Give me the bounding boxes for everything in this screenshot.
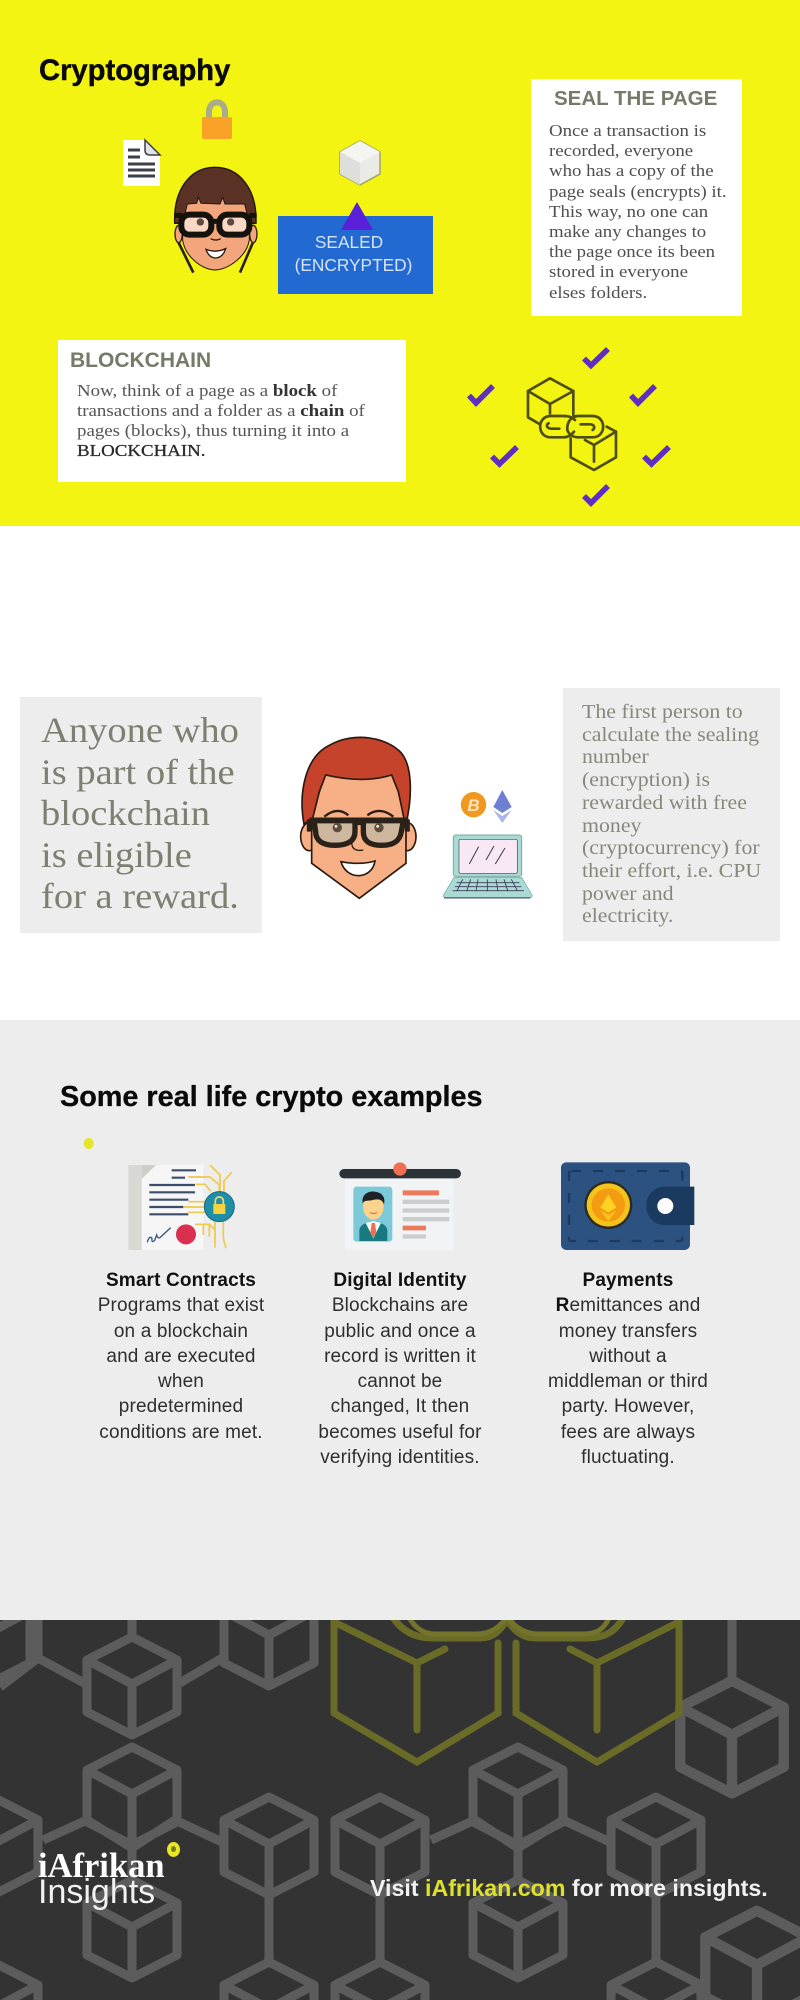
- logo: iAfrikan Insights: [38, 1842, 180, 1911]
- panel: blockchain: [58, 340, 406, 482]
- sealed label: SEALED: [315, 232, 383, 252]
- text: sealing number explanation: (encryption) is: [582, 770, 710, 791]
- text: eligible for a reward: for a reward.: [41, 876, 239, 916]
- icon: laptop: [443, 835, 532, 898]
- text column: smart contracts: [98, 1270, 264, 1443]
- icon: smart contract: [128, 1165, 234, 1250]
- text: sealing number explanation: electricity.: [582, 906, 673, 927]
- icon: padlock: [202, 102, 232, 139]
- icon: man face: [301, 737, 416, 898]
- panel: first person reward explanation: [563, 688, 780, 941]
- footer cube pattern: [0, 1620, 800, 2000]
- icon: white cube: [340, 141, 380, 185]
- text: sealing number explanation: calculate the sealing: [582, 725, 759, 746]
- text column: payments: fluctuating.: [581, 1447, 675, 1468]
- panel: sealed blue box: [278, 216, 433, 294]
- text: sealing number explanation: power and: [582, 884, 674, 905]
- text: sealing number explanation: money: [582, 816, 641, 837]
- heading: some real life crypto examples: Some real life crypto examples: [60, 1081, 483, 1113]
- text: sealing number explanation: number: [582, 747, 649, 768]
- text column: digital identity: cannot be: [358, 1371, 442, 1392]
- text column: smart contracts: Programs that exist: [98, 1295, 264, 1316]
- text: sealing number explanation: (cryptocurrency) for: [582, 838, 760, 859]
- logo wordmark: iAfrikan: [38, 1847, 165, 1885]
- text: blockchain body: BLOCKCHAIN.: [76, 441, 205, 460]
- text: eligible for a reward: blockchain: [41, 793, 210, 833]
- sealed label: (ENCRYPTED): [295, 255, 412, 275]
- text column: payments: money transfers: [559, 1321, 697, 1342]
- icon: crypto wallet: [561, 1162, 694, 1250]
- panel: cryptography yellow section: [0, 0, 800, 526]
- icon: yellow dot: [84, 1138, 94, 1149]
- icon: woman face: [175, 167, 257, 273]
- icon: ethereum diamond: [493, 790, 512, 823]
- icon: bitcoin coin: [461, 792, 486, 817]
- text column: smart contracts: and are executed: [106, 1346, 256, 1367]
- text: eligible for a reward: is eligible: [41, 835, 192, 875]
- text column: digital identity: becomes useful for: [318, 1422, 482, 1443]
- icon: bitcoin coin: B: [467, 796, 480, 815]
- icon: document: [123, 140, 160, 186]
- icon: purple triangle arrow: [341, 202, 373, 230]
- heading: Cryptography: Cryptography: [39, 55, 230, 87]
- text: seal the page body: stored in everyone: [549, 262, 688, 281]
- text: sealing number explanation: their effort, i.e. CPU: [582, 861, 761, 882]
- text: seal the page body: make any changes to: [549, 222, 706, 241]
- text column: digital identity: [318, 1270, 482, 1468]
- heading: seal the page: SEAL THE PAGE: [554, 87, 717, 110]
- big olive cubes and chain: [334, 1616, 679, 1762]
- text column: digital identity: public and once a: [324, 1321, 476, 1342]
- text column: payments: Payments: [583, 1270, 673, 1291]
- heading: blockchain: BLOCKCHAIN: [70, 349, 211, 372]
- cryptography illustrations: [123, 99, 671, 507]
- icon: purple check marks: [469, 349, 669, 503]
- text: blockchain body: Now, think of a page as a block of: [76, 381, 337, 400]
- reward illustrations: [300, 736, 533, 900]
- text: seal the page body: elses folders.: [549, 283, 647, 302]
- logo subtitle: Insights: [38, 1873, 155, 1911]
- text: eligible for a reward: [41, 710, 239, 916]
- text column: digital identity: changed, It then: [331, 1396, 469, 1417]
- text column: digital identity: Digital Identity: [333, 1270, 467, 1291]
- icon: blockchain cubes and link: [528, 378, 616, 470]
- text: sealing number explanation: The first person to: [582, 702, 743, 723]
- text: eligible for a reward: Anyone who: [41, 710, 239, 750]
- text column: smart contracts: Smart Contracts: [106, 1270, 256, 1291]
- text column: payments: party. However,: [562, 1396, 694, 1417]
- text column: payments: middleman or third: [548, 1371, 708, 1392]
- panel: seal the page: [531, 79, 742, 316]
- text: seal the page body: page seals (encrypts) it.: [549, 182, 727, 201]
- text column: payments: without a: [589, 1346, 667, 1367]
- text column: smart contracts: conditions are met.: [99, 1422, 263, 1443]
- text column: smart contracts: on a blockchain: [114, 1321, 248, 1342]
- text: sealing number explanation: [582, 702, 761, 927]
- panel: dark footer: [0, 1620, 800, 2000]
- text: seal the page body: Once a transaction is: [549, 121, 706, 140]
- text column: digital identity: Blockchains are: [332, 1295, 468, 1316]
- examples illustrations: [84, 1138, 694, 1250]
- call to action: visit iAfrikan.com: Visit iAfrikan.com for more insights.: [370, 1875, 768, 1901]
- text column: payments: [548, 1270, 708, 1468]
- text: blockchain body: [76, 381, 365, 460]
- text: seal the page body: This way, no one can: [549, 202, 708, 221]
- text: eligible for a reward: is part of the: [41, 752, 235, 792]
- text column: payments: Remittances and: [556, 1295, 700, 1316]
- text: seal the page body: the page once its been: [549, 242, 715, 261]
- text column: smart contracts: predetermined: [119, 1396, 243, 1417]
- icon: digital identity card: [339, 1162, 461, 1250]
- panel: anyone who is part of the blockchain: [20, 697, 262, 933]
- text: sealing number explanation: rewarded with free: [582, 793, 747, 814]
- sealed label: [295, 232, 412, 275]
- panel: reward white section: [0, 526, 800, 1020]
- text: seal the page body: who has a copy of the: [549, 161, 714, 180]
- text column: digital identity: record is written it: [324, 1346, 476, 1367]
- logo yellow badge: [167, 1842, 180, 1857]
- text column: smart contracts: when: [158, 1371, 204, 1392]
- text column: digital identity: verifying identities.: [320, 1447, 480, 1468]
- text column: payments: fees are always: [561, 1422, 695, 1443]
- text: seal the page body: recorded, everyone: [549, 141, 693, 160]
- text: blockchain body: transactions and a folder as a chain of: [76, 401, 364, 420]
- panel: real life examples gray section: [0, 1020, 800, 1620]
- text: seal the page body: [549, 121, 727, 302]
- text: blockchain body: pages (blocks), thus turning it into a: [76, 421, 349, 440]
